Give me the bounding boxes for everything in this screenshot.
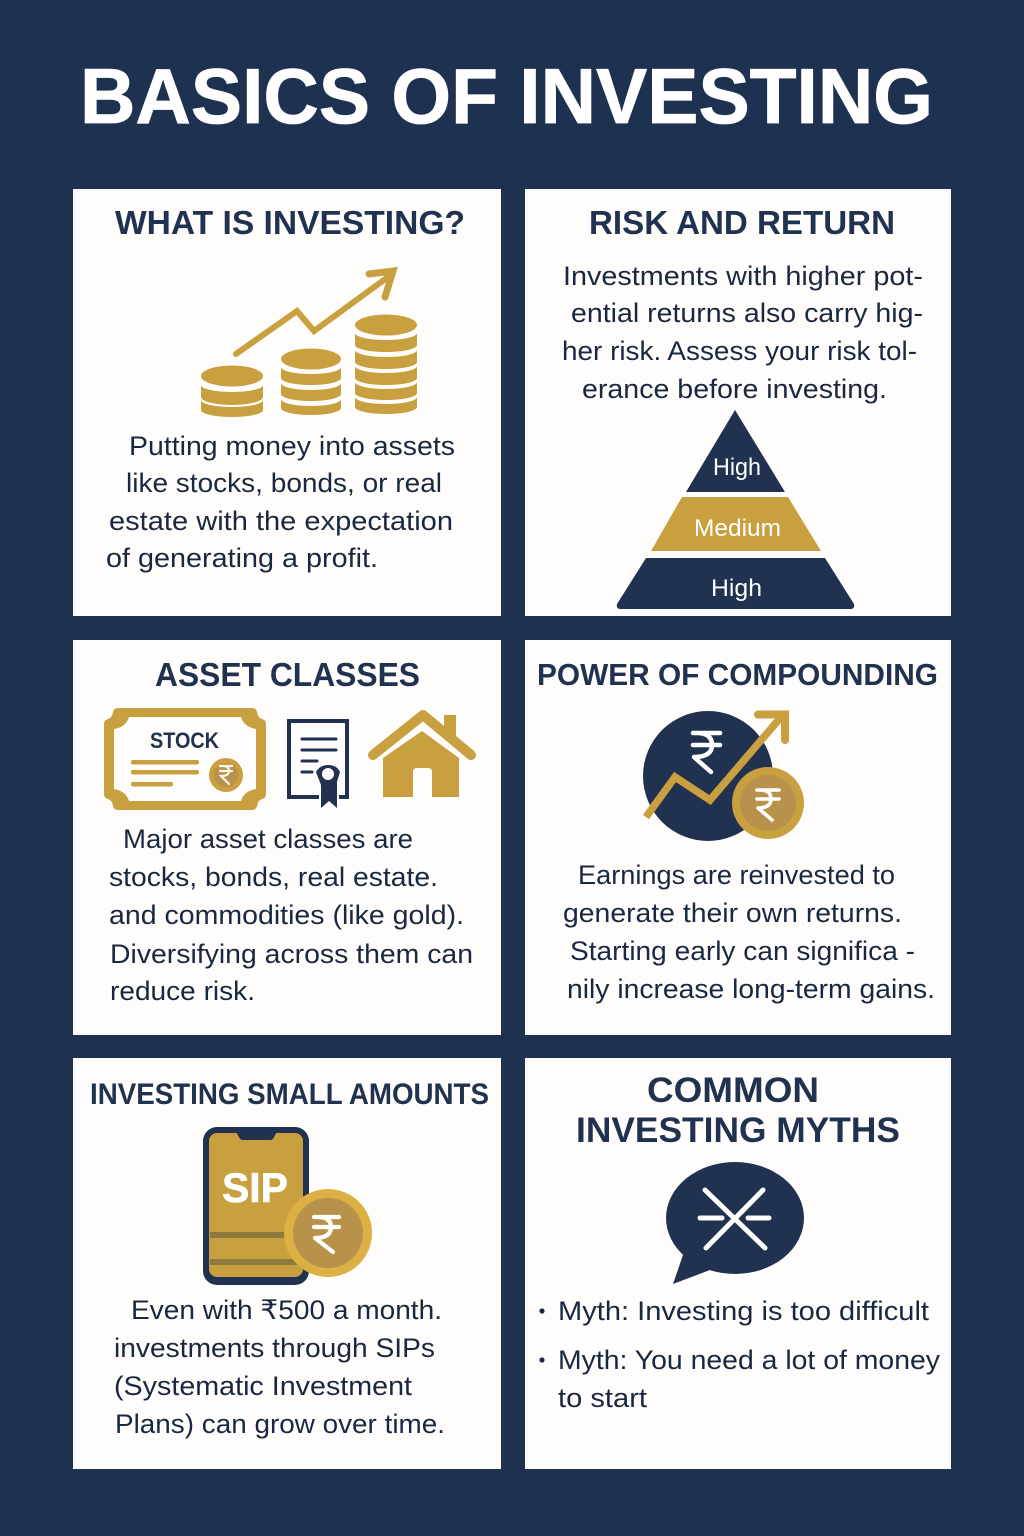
icon: SIP phone with rupee coin: SIP	[222, 1164, 288, 1211]
pyramid tier: medium	[651, 497, 821, 551]
heading: what is investing: WHAT IS INVESTING?	[115, 204, 465, 241]
heading: common investing myths: COMMON	[647, 1071, 819, 1110]
text: risk and return body	[562, 261, 923, 404]
icon: SIP phone with rupee coin	[203, 1127, 372, 1285]
heading: common investing myths: INVESTING MYTHS	[576, 1111, 900, 1150]
text: small amounts body: (Systematic Investment	[114, 1371, 413, 1401]
text: asset classes body: reduce risk.	[110, 976, 255, 1006]
text: compounding body: generate their own returns.	[563, 898, 902, 928]
text: asset classes body: Diversifying across them can	[110, 939, 473, 969]
icon: bond document	[289, 721, 347, 808]
heading: asset classes: ASSET CLASSES	[155, 656, 420, 693]
text: asset classes body: stocks, bonds, real estate.	[109, 862, 438, 892]
text: asset classes body: Major asset classes are	[123, 824, 413, 854]
text: compounding body: nily increase long-term gains.	[567, 974, 935, 1004]
heading: investing small amounts: INVESTING SMALL AMOUNTS	[90, 1078, 489, 1111]
pyramid tier: bottom high	[617, 558, 854, 609]
text: asset classes body	[109, 824, 473, 1006]
text: risk and return body: ential returns also carry hig-	[571, 298, 923, 328]
text: myth list: Myth: You need a lot of money	[558, 1345, 941, 1375]
panel: what is investing	[73, 189, 501, 616]
icon: stock certificate	[104, 708, 266, 810]
pyramid tier: bottom high: High	[711, 575, 762, 602]
panel: power of compounding	[525, 640, 951, 1035]
panel: investing small amounts	[73, 1058, 501, 1469]
heading: power of compounding: POWER OF COMPOUNDING	[537, 657, 938, 692]
text: myth list: to start	[558, 1383, 648, 1413]
text: small amounts body: Even with ₹500 a month.	[131, 1295, 442, 1325]
text: myth list	[539, 1296, 941, 1413]
pyramid tier: top high	[686, 410, 785, 492]
text: small amounts body	[114, 1295, 445, 1439]
text: myth list: Myth: Investing is too difficult	[558, 1296, 930, 1326]
text: compounding body: Earnings are reinvested to	[578, 860, 895, 890]
panel: risk and return	[525, 189, 951, 616]
text: small amounts body: Plans) can grow over time.	[115, 1409, 445, 1439]
text: what is investing body: Putting money into assets	[129, 431, 455, 461]
text: risk and return body: her risk. Assess your risk tol-	[562, 336, 917, 366]
panel: asset classes	[73, 640, 501, 1035]
icon: house	[373, 715, 471, 797]
text: compounding body: Starting early can significa -	[570, 936, 915, 966]
pyramid tier: top high: High	[713, 454, 761, 481]
heading: risk and return: RISK AND RETURN	[589, 204, 895, 241]
title: BASICS OF INVESTING	[80, 52, 933, 140]
text: small amounts body: investments through SIPs	[114, 1333, 435, 1363]
text: compounding body	[563, 860, 935, 1004]
pyramid tier: medium: Medium	[694, 515, 781, 542]
text: what is investing body: of generating a profit.	[106, 543, 378, 573]
text: what is investing body: like stocks, bonds, or real	[126, 468, 442, 498]
text: risk and return body: erance before investing.	[582, 374, 887, 404]
icon: stock certificate: STOCK	[150, 728, 219, 753]
icon: rupee growth chart	[643, 711, 804, 841]
text: asset classes body: and commodities (like gold).	[109, 900, 464, 930]
icon: speech bubble with cross	[666, 1162, 804, 1284]
text: what is investing body: estate with the expectation	[109, 506, 453, 536]
text: what is investing body	[106, 431, 455, 573]
text: risk and return body: Investments with higher pot-	[563, 261, 923, 291]
panel: common investing myths	[525, 1058, 951, 1469]
chart: risk pyramid	[617, 410, 854, 609]
heading: common investing myths	[576, 1071, 900, 1150]
icon: coin stacks with rising arrow	[201, 271, 417, 417]
